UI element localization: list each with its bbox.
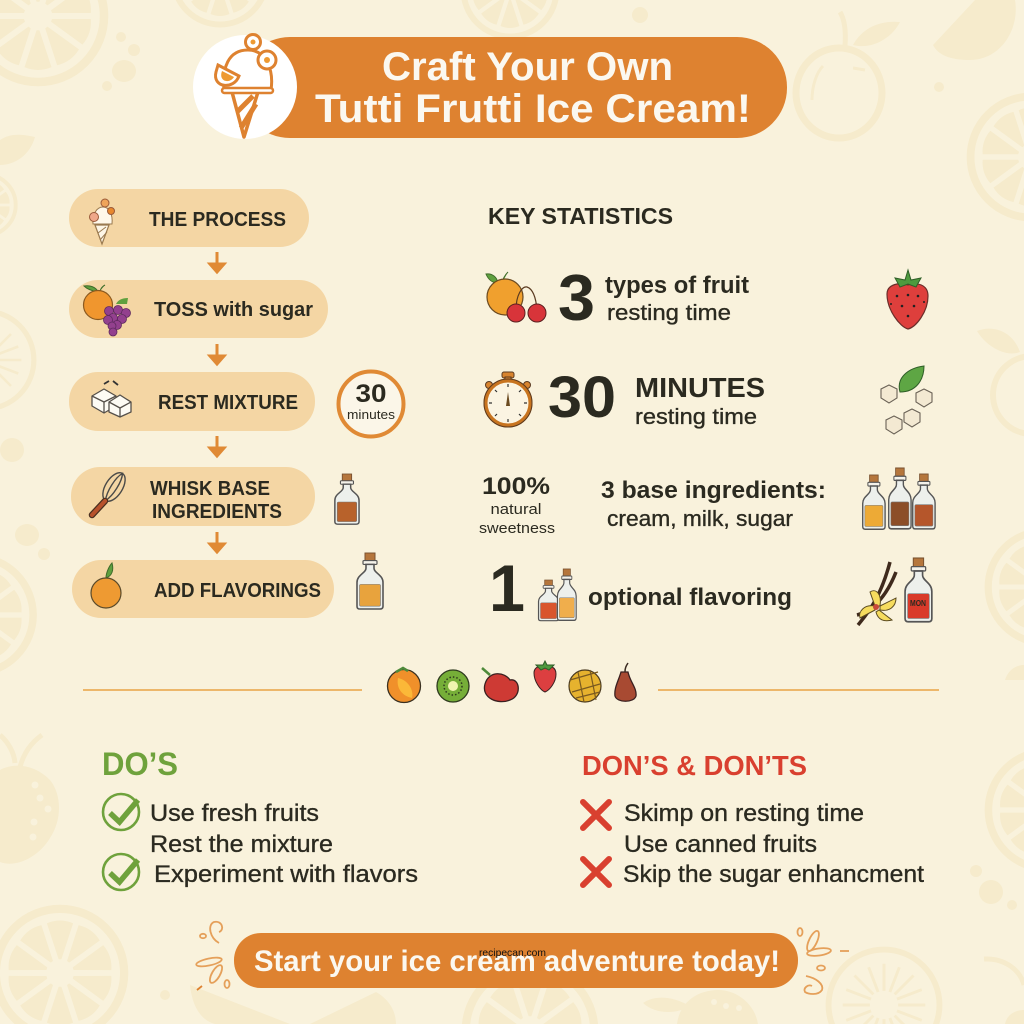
- step: rest mixture: [69, 372, 315, 431]
- callout: 30 minutes: minutes: [347, 407, 396, 422]
- step: add flavorings: ADD FLAVORINGS: [154, 580, 321, 602]
- icon: kiwi: [437, 670, 469, 702]
- stat: 100% natural sweetness: sweetness: [479, 520, 555, 537]
- stat: 3 base ingredients: [601, 477, 826, 531]
- stat: 30 minutes: [484, 365, 765, 430]
- callout: 30 minutes: [338, 372, 404, 436]
- icon: bottle: [357, 553, 383, 609]
- icon: cross: [583, 802, 609, 828]
- panel: do's: [102, 746, 418, 890]
- text: rest the mixture: Rest the mixture: [150, 831, 333, 858]
- step: whisk base ingredients: [71, 467, 315, 526]
- step: the process: [69, 189, 309, 247]
- stat: 100% natural sweetness: [479, 473, 555, 537]
- stat: 3 base ingredients: cream, milk, sugar: [607, 506, 793, 531]
- icon: orange: [388, 668, 420, 702]
- stat: 3 types of fruit: 3: [558, 261, 595, 334]
- arrow: [210, 344, 224, 364]
- icon: red fruit: [482, 668, 518, 702]
- button text: Start your ice cream adventure today!: [254, 945, 780, 978]
- text: use canned fruits: Use canned fruits: [624, 831, 817, 858]
- icon: check: [103, 854, 139, 890]
- callout: 30 minutes: 30: [356, 380, 386, 408]
- icon: vanilla flower and bottle: MON: [910, 599, 926, 608]
- button: [234, 933, 798, 988]
- panel: don's and don'ts: [582, 750, 924, 888]
- title text: Craft Your Own: [382, 45, 673, 89]
- arrow: [210, 252, 224, 272]
- text: skimp on resting time: Skimp on resting time: [624, 800, 864, 827]
- stat: 1 optional flavoring: 1: [489, 551, 525, 625]
- step: rest mixture: REST MIXTURE: [158, 392, 298, 414]
- icon: pear: [615, 663, 636, 701]
- divider with fruits: [83, 661, 939, 702]
- banner pill: [240, 37, 787, 138]
- stat: 30 minutes: resting time: [635, 404, 757, 429]
- icon: bottle: [335, 474, 359, 524]
- arrow: [210, 532, 224, 552]
- step: toss with sugar: [69, 280, 328, 338]
- icon: three bottles: [863, 468, 935, 529]
- stat: 100% natural sweetness: natural: [490, 501, 542, 518]
- icon: strawberry: [534, 661, 556, 692]
- call to action: [196, 922, 849, 994]
- icon: ice cream cone badge: [193, 34, 297, 139]
- heading: do's: DO’S: [102, 746, 178, 782]
- step: whisk base ingredients: INGREDIENTS: [152, 501, 282, 523]
- heading: don's and don'ts: DON’S & DON’TS: [582, 750, 807, 781]
- splash right: [798, 928, 849, 994]
- step: toss with sugar: TOSS with sugar: [154, 299, 313, 321]
- panel: the process: [69, 189, 404, 618]
- stat: 30 minutes: MINUTES: [635, 372, 765, 403]
- icon: cross: [583, 859, 609, 885]
- icon: strawberry: [887, 270, 928, 329]
- panel: key statistics: [479, 203, 935, 625]
- stat: 3 base ingredients: 3 base ingredients:: [601, 477, 826, 504]
- text: skip the sugar enhancment: Skip the sugar enhancment: [623, 861, 924, 888]
- step: whisk base ingredients: WHISK BASE: [150, 478, 270, 500]
- stat: 100% natural sweetness: 100%: [482, 473, 550, 500]
- icon: sugar crystals and leaf: [881, 366, 932, 434]
- stat: 30 minutes: 30: [548, 365, 616, 430]
- title banner: Tutti Frutti Ice Cream!: [315, 87, 751, 131]
- icon: check: [103, 794, 139, 830]
- icon: mango: [569, 670, 601, 702]
- step: add flavorings: [72, 560, 334, 618]
- title banner: [193, 34, 787, 139]
- text: experiment with flavors: Experiment with flavors: [154, 861, 418, 888]
- arrow: [210, 436, 224, 456]
- step: the process: THE PROCESS: [149, 209, 286, 231]
- heading: key statistics: KEY STATISTICS: [488, 203, 673, 229]
- text: use fresh fruits: Use fresh fruits: [150, 800, 319, 827]
- icon: vanilla flower and bottle: [857, 558, 932, 625]
- stat: 1 optional flavoring: optional flavoring: [588, 584, 792, 611]
- stat: 1 optional flavoring: [489, 551, 792, 625]
- watermark text: recipecan.com: [479, 947, 546, 959]
- stat: 3 types of fruit: resting time: [607, 300, 731, 325]
- splash left: [196, 922, 230, 990]
- stat: 3 types of fruit: types of fruit: [605, 272, 749, 299]
- stat: 3 types of fruit: [486, 261, 749, 334]
